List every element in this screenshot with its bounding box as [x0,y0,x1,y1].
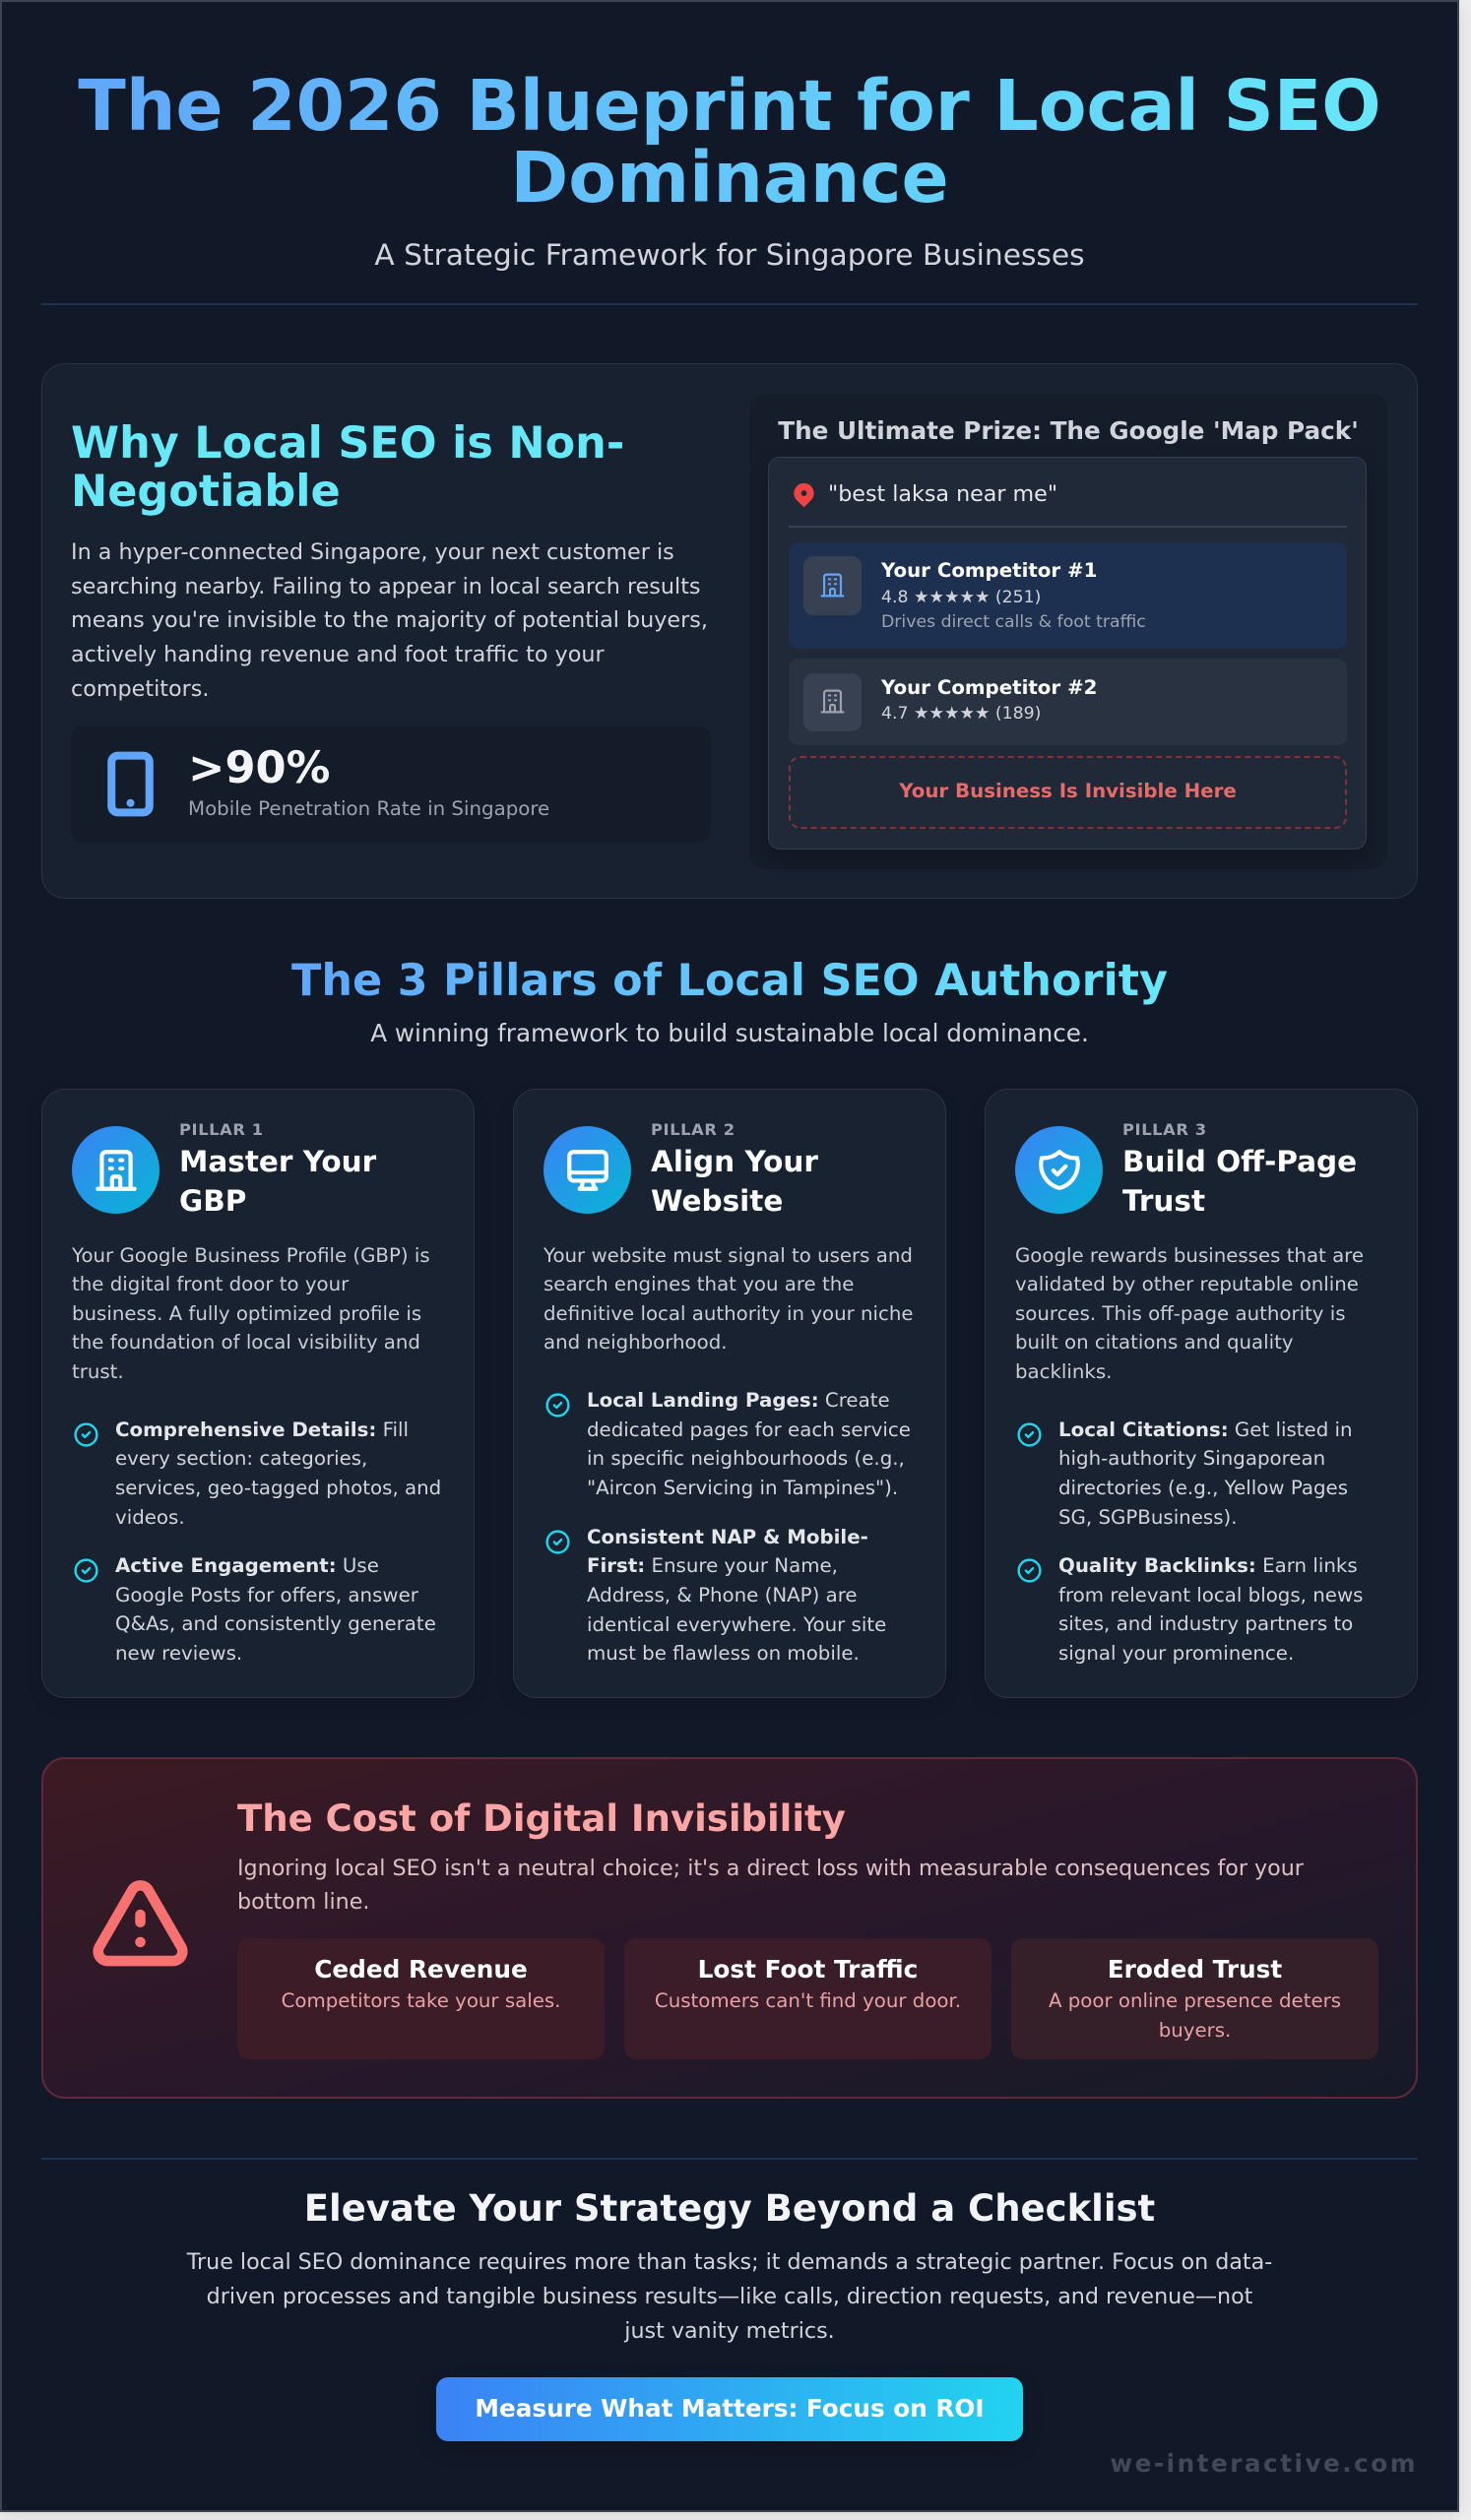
pillar 3 item 2: sites, and industry partners to [1058,1612,1353,1635]
panel: pillar 2 [513,1089,946,1698]
competitor 1 row [789,542,1347,649]
paragraph: elevate strategy [187,2248,1272,2344]
pillar 3 paragraph: validated by other reputable online [1015,1273,1359,1295]
pillar 3 paragraph [1015,1244,1364,1383]
section heading: pillars: The 3 Pillars of Local SEO Authority [291,956,1168,1006]
pillar 1 title [179,1145,376,1218]
cost box 3 text: A poor online presence deters [1049,1989,1341,2012]
paragraph: elevate strategy: True local SEO dominance requires more than tasks; it demands a strategic partner. Focus on data- [187,2248,1272,2274]
icon: map pin [794,482,814,508]
mock search results card [768,457,1367,850]
pillar 1 item 2: Google Posts for offers, answer [115,1584,418,1606]
pillar 3 label: PILLAR 3 [1122,1120,1207,1139]
pillar 2 paragraph: Your website must signal to users and [544,1244,913,1266]
pillar 3 item 1 [1058,1418,1353,1529]
icon: pillar 1 check 1 [74,1422,98,1447]
pillar 2 item 2: First: Ensure your Name, [587,1554,838,1577]
watermark: we-interactive.com [1110,2449,1418,2478]
pillar 1 paragraph: trust. [72,1360,124,1383]
icon: mobile phone [107,752,154,817]
paragraph: why local SEO: competitors. [71,676,209,702]
pillar 1 paragraph: the digital front door to your [72,1273,349,1295]
pillar 2 item 2: identical everywhere. Your site [587,1613,886,1636]
pillar 3 item 1: SG, SGPBusiness). [1058,1506,1238,1529]
paragraph: why local SEO: means you're invisible to the majority of potential buyers, [71,607,708,633]
pillar 1 title: GBP [179,1184,246,1218]
heading: cost of invisibility: The Cost of Digital Invisibility [237,1797,846,1840]
pillar 2 item 2: Consistent NAP & Mobile- [587,1526,868,1547]
pillar 2 title: Align Your [651,1145,818,1178]
pillar 2 item 2: Address, & Phone (NAP) are [587,1584,858,1606]
competitor 2 name: Your Competitor #2 [881,676,1097,699]
title: The 2026 Blueprint for Local SEO [78,65,1381,147]
icon: pillar 1 check 2 [74,1558,98,1583]
pillar 1 title: Master Your [179,1145,376,1178]
pillar 1 paragraph: the foundation of local visibility and [72,1331,420,1354]
competitor 2 row [789,659,1347,745]
pillar 3 paragraph: built on citations and quality [1015,1331,1294,1354]
competitor 1 note: Drives direct calls & foot traffic [881,612,1146,632]
pillar 3 item 1: directories (e.g., Yellow Pages [1058,1477,1348,1499]
pillar 2 item 1 [587,1389,911,1499]
paragraph: elevate strategy: driven processes and tangible business results—like calls, direction requests, and revenue—not [207,2284,1252,2309]
icon: warning triangle [93,1880,188,1967]
pillar 1 item 2: Q&As, and consistently generate [115,1612,436,1635]
paragraph: cost of invisibility: Ignoring local SEO isn't a neutral choice; it's a direct loss with measurable consequences for your [237,1856,1304,1881]
cost box 1 [237,1938,605,2059]
paragraph: why local SEO: In a hyper-connected Singapore, your next customer is [71,539,674,565]
pillar 2 label: PILLAR 2 [651,1120,736,1139]
pillar 1 item 2 [115,1554,436,1665]
paragraph: why local SEO [71,539,708,702]
pillar 1 item 1: Comprehensive Details: Fill [115,1418,409,1441]
pillar 3 item 2: signal your prominence. [1058,1642,1294,1665]
panel: cost of invisibility [41,1757,1418,2099]
section subheading: pillars: A winning framework to build sustainable local dominance. [370,1019,1089,1047]
pillar 2 item 2 [587,1526,886,1665]
icon: pillar 2 monitor [544,1126,631,1214]
pillar 2 title: Website [651,1184,783,1218]
heading: why local SEO: Negotiable [71,467,341,517]
invisible business slot [789,756,1347,829]
pillar 1 paragraph [72,1244,430,1383]
pillar 3 item 2: from relevant local blogs, news [1058,1584,1363,1606]
icon: pillar 3 check 1 [1017,1422,1042,1447]
icon: pillar 2 check 2 [545,1530,570,1554]
icon: building blue [821,573,845,597]
paragraph: cost of invisibility [237,1856,1304,1915]
call to action button [436,2377,1023,2441]
cost box 2 text: Customers can't find your door. [655,1989,961,2012]
competitor 1 icon box [803,556,862,615]
pillar 3 item 1: Local Citations: Get listed in [1058,1418,1353,1441]
pillar 2 item 1: "Aircon Servicing in Tampines"). [587,1477,898,1499]
heading: why local SEO: Why Local SEO is Non- [71,418,624,469]
cost box 2 title: Lost Foot Traffic [698,1955,918,1984]
pillar 3 title: Build Off-Page [1122,1145,1357,1178]
pillar 1 paragraph: Your Google Business Profile (GBP) is [72,1244,430,1266]
pillar 2 paragraph: definitive local authority in your niche [544,1302,914,1325]
icon: building gray [821,689,845,713]
icon: pillar 1 building [72,1126,160,1214]
subtitle: A Strategic Framework for Singapore Businesses [374,238,1085,273]
pillar 2 paragraph: and neighborhood. [544,1331,728,1354]
cost box 3 text: buyers. [1159,2019,1231,2042]
heading: why local SEO [71,418,624,517]
pillar 1 item 1: services, geo-tagged photos, and [115,1477,441,1499]
pillar 1 paragraph: business. A fully optimized profile is [72,1302,421,1325]
pillar 1 item 1 [115,1418,441,1529]
pillar 2 item 2: must be flawless on mobile. [587,1642,860,1665]
stat value: >90% [188,742,330,793]
pillar 1 item 2: new reviews. [115,1642,242,1665]
title: Dominance [510,137,949,219]
pillar 2 paragraph: search engines that you are the [544,1273,854,1295]
call to action button: Measure What Matters: Focus on ROI [475,2394,985,2423]
competitor 1 name: Your Competitor #1 [881,559,1097,582]
cost box 1 text: Competitors take your sales. [282,1989,560,2012]
icon: pillar 2 check 1 [545,1393,570,1418]
paragraph: elevate strategy: just vanity metrics. [624,2318,835,2344]
icon: pillar 3 shield [1015,1126,1103,1214]
pillar 2 title [651,1145,818,1218]
panel: why local SEO [41,363,1418,899]
pillar 3 item 1: high-authority Singaporean [1058,1447,1325,1470]
pillar 2 item 1: in specific neighbourhoods (e.g., [587,1447,905,1470]
paragraph: why local SEO: actively handing revenue and foot traffic to your [71,642,605,667]
pillar 1 item 1: videos. [115,1506,185,1529]
paragraph: why local SEO: searching nearby. Failing to appear in local search results [71,574,701,599]
panel: map pack [749,394,1387,869]
cost box 3 title: Eroded Trust [1108,1955,1282,1984]
heading: elevate strategy: Elevate Your Strategy Beyond a Checklist [304,2187,1155,2230]
stat label: Mobile Penetration Rate in Singapore [188,797,549,820]
pillar 3 item 2 [1058,1554,1363,1665]
stat box [71,726,711,843]
pillar 1 label: PILLAR 1 [179,1120,264,1139]
competitor 1 rating: 4.8 ★★★★★ (251) [881,588,1041,607]
pillar 2 item 1: Local Landing Pages: Create [587,1389,890,1412]
competitor 2 rating: 4.7 ★★★★★ (189) [881,704,1041,724]
cost box 2 [624,1938,991,2059]
pillar 2 paragraph [544,1244,914,1354]
icon: pillar 3 check 2 [1017,1558,1042,1583]
heading: map pack: The Ultimate Prize: The Google 'Map Pack' [778,416,1359,445]
panel: pillar 1 [41,1089,475,1698]
invisible business label: Your Business Is Invisible Here [899,780,1237,802]
section heading: pillars [41,954,1418,1009]
panel: pillar 3 [985,1089,1418,1698]
title [41,70,1418,214]
pillar 3 paragraph: backlinks. [1015,1360,1112,1383]
paragraph: cost of invisibility: bottom line. [237,1889,369,1915]
search query: "best laksa near me" [828,481,1057,507]
pillar 1 item 1: every section: categories, [115,1447,367,1470]
pillar 3 title [1122,1145,1357,1218]
pillar 3 item 2: Quality Backlinks: Earn links [1058,1554,1358,1577]
cost box 1 title: Ceded Revenue [314,1955,528,1984]
cost box 3 text [1049,1989,1341,2042]
pillar 3 paragraph: Google rewards businesses that are [1015,1244,1364,1266]
pillar 2 item 1: dedicated pages for each service [587,1418,911,1441]
pillar 3 title: Trust [1122,1184,1205,1218]
pillar 3 paragraph: sources. This off-page authority is [1015,1302,1346,1325]
cost box 3 [1011,1938,1378,2059]
pillar 1 item 2: Active Engagement: Use [115,1554,379,1577]
competitor 2 icon box [803,673,862,731]
